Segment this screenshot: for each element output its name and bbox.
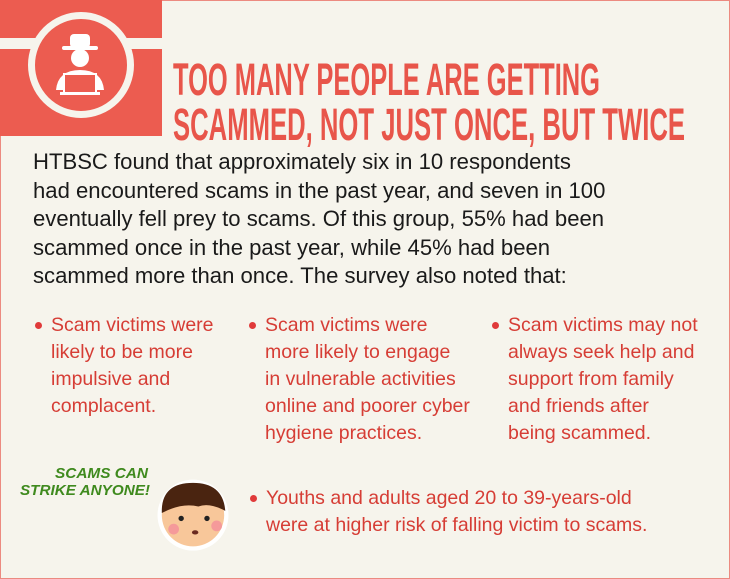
- bullet 3: and friends after: [508, 395, 649, 417]
- bullet 1: Scam victims were: [51, 314, 214, 336]
- intro text: eventually fell prey to scams. Of this group, 55% had been: [33, 206, 604, 231]
- icon: boy face: [158, 480, 228, 550]
- intro text: HTBSC found that approximately six in 10 respondents: [33, 149, 571, 174]
- callout: scams can strike anyone: STRIKE ANYONE!: [20, 482, 150, 499]
- bullet 2: in vulnerable activities: [265, 368, 456, 390]
- title: [173, 55, 685, 150]
- bullet 2: more likely to engage: [265, 341, 450, 363]
- bullet 4: were at higher risk of falling victim to scams.: [266, 514, 647, 536]
- callout: scams can strike anyone: SCAMS CAN: [55, 465, 149, 482]
- bullet 2: hygiene practices.: [265, 422, 422, 444]
- bullet 2: online and poorer cyber: [265, 395, 470, 417]
- bullet 4: [266, 485, 647, 539]
- bullet 1: impulsive and: [51, 368, 170, 390]
- bullet 4: Youths and adults aged 20 to 39-years-old: [266, 487, 632, 509]
- bullet 2: Scam victims were: [265, 314, 428, 336]
- bullet 3: Scam victims may not: [508, 314, 698, 336]
- bullet 3: support from family: [508, 368, 674, 390]
- intro text: had encountered scams in the past year, and seven in 100: [33, 178, 605, 202]
- bullet 1: [51, 312, 214, 420]
- header icon block: [0, 0, 162, 136]
- intro text: scammed more than once. The survey also noted that:: [33, 263, 567, 288]
- intro text: [33, 149, 605, 288]
- bullet 3: being scammed.: [508, 422, 651, 444]
- bullet 2: [265, 312, 470, 447]
- callout: scams can strike anyone: [20, 465, 150, 499]
- bullet 3: always seek help and: [508, 341, 694, 363]
- bullet 3: [508, 312, 698, 447]
- bullet 1: complacent.: [51, 395, 156, 417]
- intro text: scammed once in the past year, while 45% had been: [33, 234, 550, 260]
- bullet 1: likely to be more: [51, 341, 193, 363]
